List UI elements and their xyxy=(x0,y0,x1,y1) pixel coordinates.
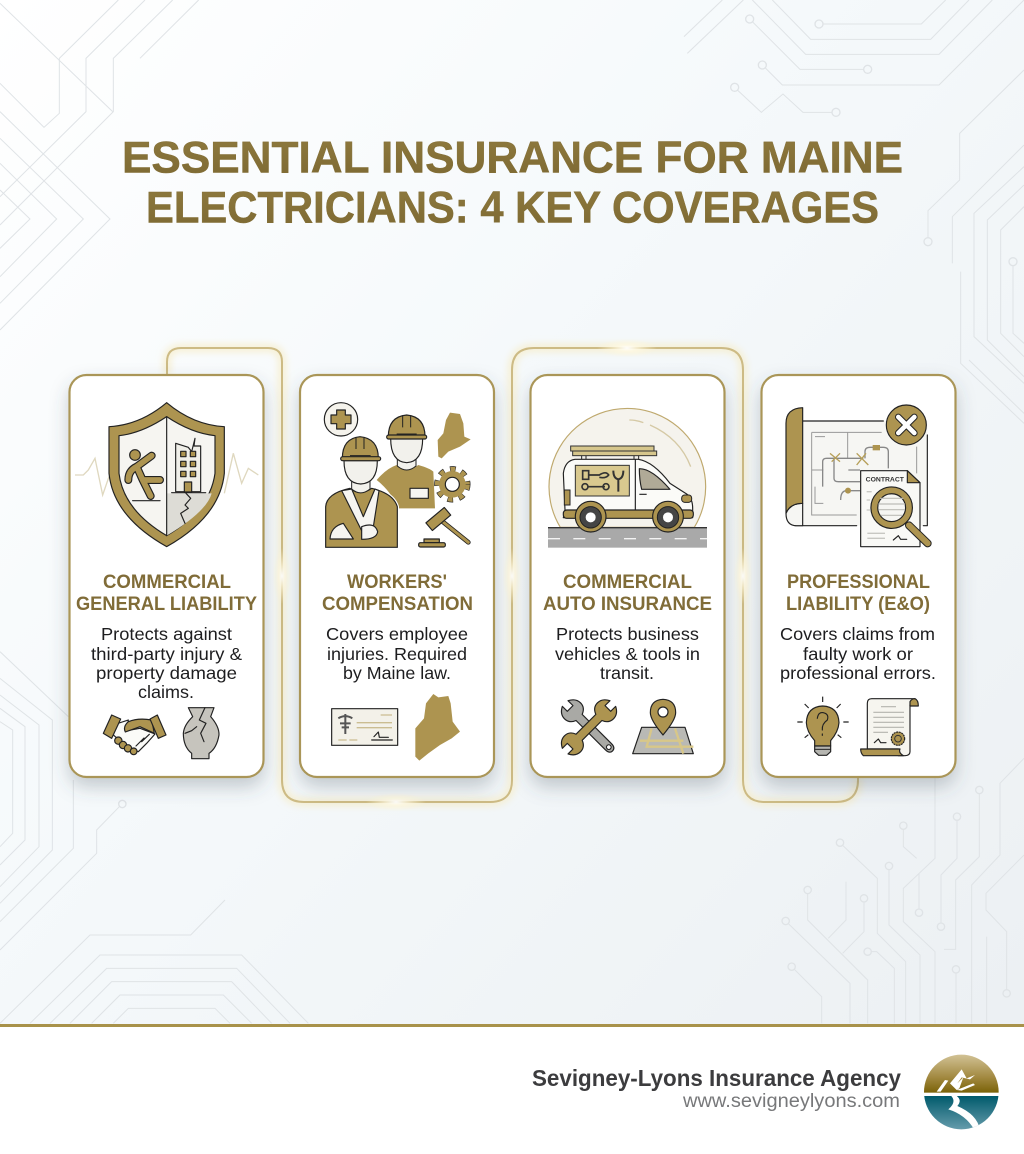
circuit pattern: bottom left xyxy=(0,652,308,1023)
description: Covers employee xyxy=(326,624,468,644)
description xyxy=(91,624,242,702)
description: faulty work or xyxy=(803,644,913,664)
icon: work van on road xyxy=(548,408,707,548)
icon: handshake xyxy=(103,715,166,755)
heading: WORKERS' xyxy=(347,572,447,593)
footer xyxy=(0,1024,1024,1154)
description: property damage xyxy=(96,663,237,683)
heading: LIABILITY (E&O) xyxy=(786,594,930,615)
description xyxy=(555,624,700,683)
heading xyxy=(543,572,712,615)
description xyxy=(780,624,936,683)
circuit pattern: bottom right xyxy=(782,758,1024,1023)
icon: benefits check xyxy=(332,709,398,745)
icon: map pin xyxy=(633,699,693,754)
icon: shield with fall and building damage xyxy=(75,403,258,547)
panel: professional liability xyxy=(762,375,956,777)
circuit pattern: top left xyxy=(0,0,199,330)
agency name: Sevigney-Lyons Insurance Agency xyxy=(532,1065,901,1091)
title: ESSENTIAL INSURANCE FOR MAINE xyxy=(122,134,903,182)
icon: light bulb with question mark xyxy=(797,697,849,755)
description: injuries. Required xyxy=(327,644,467,664)
description: transit. xyxy=(600,663,654,683)
heading: GENERAL LIABILITY xyxy=(76,594,257,615)
description: Protects business xyxy=(556,624,699,644)
description: vehicles & tools in xyxy=(555,644,700,664)
description: Covers claims from xyxy=(780,624,935,644)
heading xyxy=(322,572,473,615)
description: claims. xyxy=(138,682,194,702)
icon: Maine map xyxy=(415,694,460,761)
heading: COMPENSATION xyxy=(322,594,473,615)
icon: injured workers, plus, Maine, gear, gavel xyxy=(324,403,471,548)
heading: COMMERCIAL xyxy=(563,572,692,593)
glowing connector line xyxy=(167,339,858,811)
icon: policy scroll with seal xyxy=(861,699,918,756)
heading xyxy=(76,572,257,615)
icon: blueprint, contract and magnifier xyxy=(786,405,928,547)
title xyxy=(122,134,903,232)
heading xyxy=(786,572,930,615)
icon: crossed wrenches xyxy=(557,696,621,759)
icon: blueprint, contract and magnifier: CONTRACT xyxy=(866,477,904,484)
panel: commercial auto insurance xyxy=(530,375,724,777)
heading: AUTO INSURANCE xyxy=(543,594,712,615)
heading: PROFESSIONAL xyxy=(787,572,930,593)
icon: cracked vase xyxy=(183,708,219,759)
logo xyxy=(923,1053,1000,1131)
description: Protects against xyxy=(101,624,232,644)
description xyxy=(326,624,468,683)
panel: workers compensation xyxy=(300,375,494,777)
website: www.sevigneylyons.com xyxy=(682,1090,900,1112)
heading: COMMERCIAL xyxy=(103,572,231,593)
circuit pattern: top right xyxy=(684,0,1024,423)
panel: commercial general liability xyxy=(70,375,264,777)
description: third-party injury & xyxy=(91,644,242,664)
description: professional errors. xyxy=(780,663,936,683)
title: ELECTRICIANS: 4 KEY COVERAGES xyxy=(146,184,879,232)
description: by Maine law. xyxy=(343,663,451,683)
